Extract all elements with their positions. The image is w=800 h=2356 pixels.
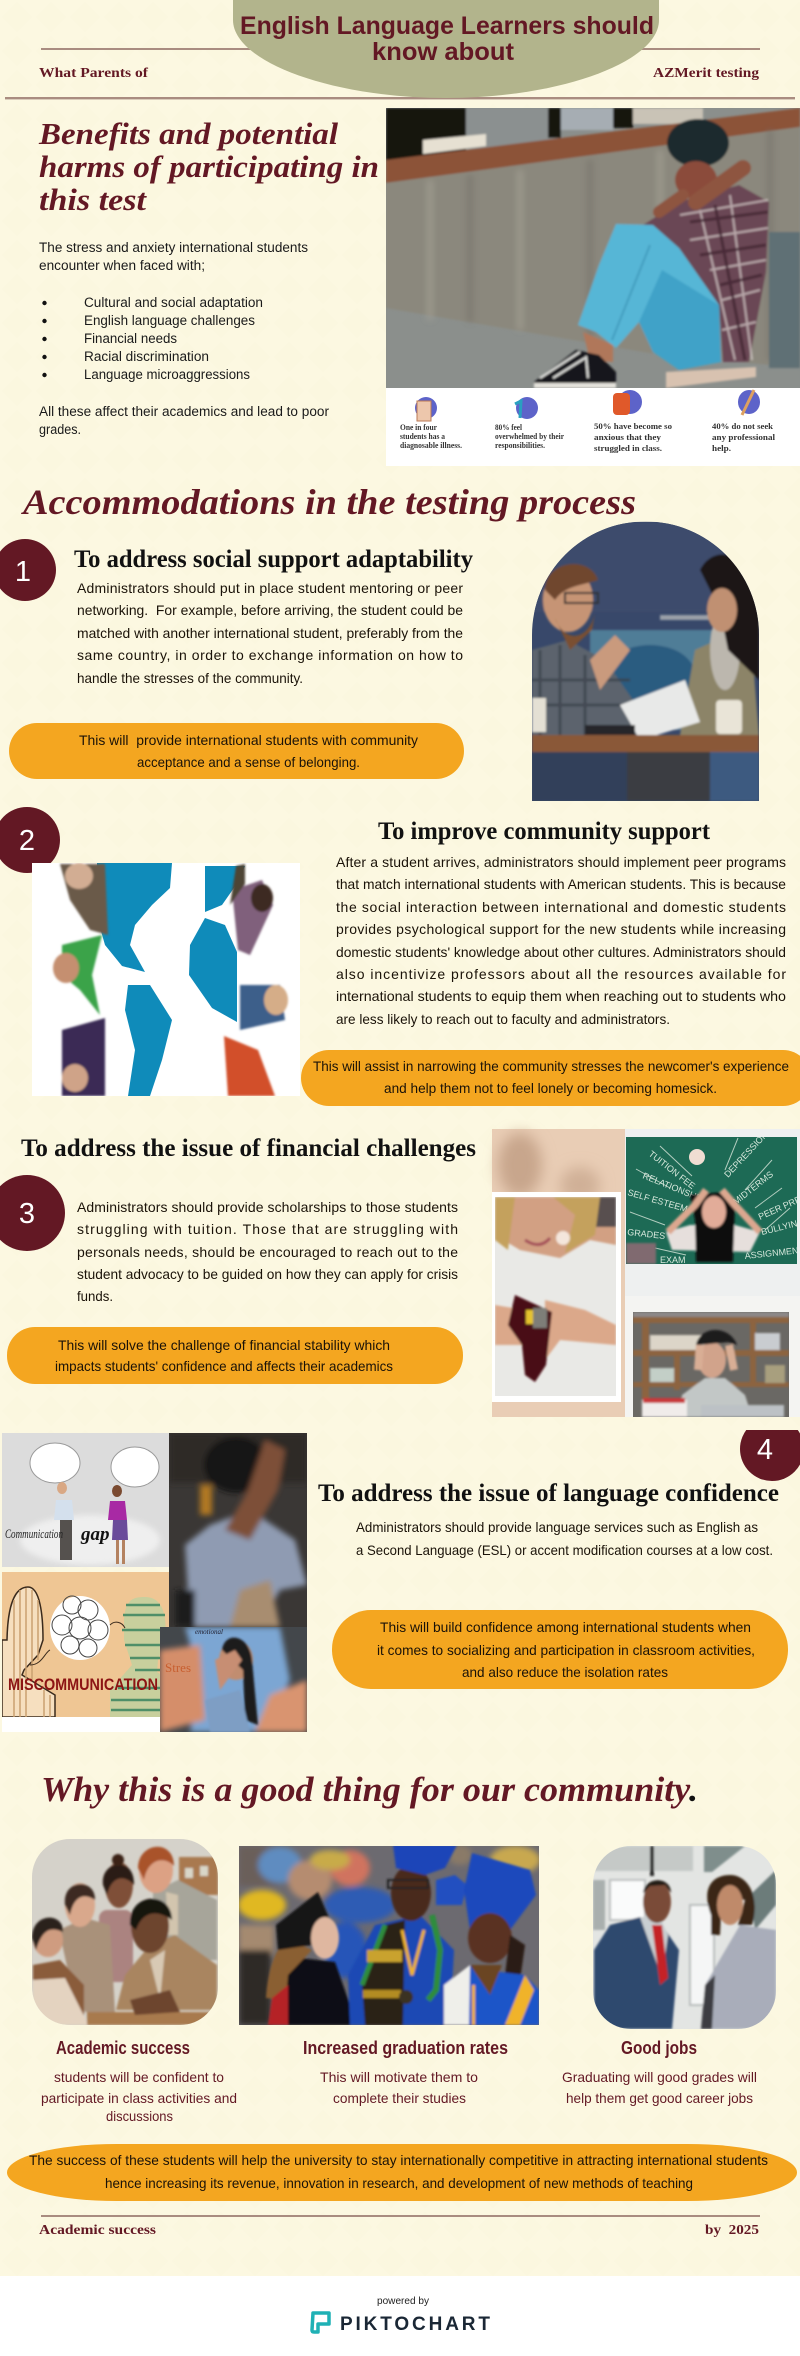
- bullet list: [42, 295, 263, 382]
- paragraph: mentoring: networking. For example, before arriving, the student could be: [77, 602, 463, 618]
- description: participate in class activities and: [41, 2090, 237, 2106]
- photo: woman with head in hands: [169, 1433, 307, 1627]
- image: world map with people: [32, 863, 300, 1096]
- heading: community support: To improve community support: [378, 818, 711, 845]
- intro text: The stress and anxiety international students: [39, 240, 308, 255]
- intro text: encounter when faced with;: [39, 258, 205, 273]
- closing text: grades.: [39, 422, 81, 437]
- illustration: communication gap: [2, 1433, 169, 1567]
- number badge 3: 3: [19, 1198, 35, 1230]
- bullet list: Financial needs: [84, 331, 177, 346]
- photo: student overwhelmed at chalkboard: EXAM: [660, 1255, 686, 1265]
- callout 4: it comes to socializing and participation in classroom activities,: [377, 1642, 755, 1658]
- number badge 2: [0, 807, 60, 873]
- section 1: social support: [0, 539, 473, 779]
- number badge 2: 2: [19, 825, 35, 857]
- header left label: What Parents of: [39, 66, 148, 81]
- paragraph: scholarships: [77, 1199, 458, 1304]
- photo: student overwhelmed at chalkboard: [626, 1129, 800, 1265]
- footer right label: by 2025: [705, 2223, 759, 2238]
- heading: benefits and potential harms: [38, 116, 379, 217]
- callout: university benefits: [7, 2144, 797, 2201]
- heading: benefits and potential harms: this test: [39, 182, 148, 217]
- paragraph: scholarships: student advocacy to be guided on how they can apply for crisis: [77, 1266, 458, 1282]
- number badge 4: [740, 1430, 800, 1481]
- benefit: good jobs: [562, 2038, 757, 2106]
- description: students will be confident to: [54, 2069, 224, 2085]
- stat: 40% no help: help.: [712, 444, 731, 453]
- benefit: academic success: [41, 2038, 237, 2124]
- photo: two business professionals: [593, 1846, 776, 2029]
- bullet list: Language microaggressions: [84, 367, 250, 382]
- photo: graduates in blue gowns: [238, 1845, 540, 2025]
- intro text: [39, 240, 308, 273]
- stat: 80% feel overwhelmed: [495, 397, 564, 450]
- paragraph: peer programs: provides psychological support for the new students while increasing: [336, 921, 786, 937]
- callout 2: This will assist in narrowing the community stresses the newcomer's experience: [313, 1058, 789, 1074]
- paragraph: peer programs: that match international students with American students. This is because: [336, 876, 786, 892]
- bullet list: Cultural and social adaptation: [84, 295, 263, 310]
- paragraph: mentoring: [77, 580, 463, 686]
- description: [320, 2069, 478, 2106]
- bullet list: English language challenges: [84, 313, 255, 328]
- section 4: language confidence: [318, 1417, 800, 1689]
- paragraph: mentoring: same country, in order to exchange information on how to: [77, 647, 463, 663]
- callout 3: [7, 1327, 463, 1384]
- callout 3: This will solve the challenge of financial stability which: [58, 1337, 390, 1353]
- benefit: increased graduation rates: [303, 2038, 508, 2106]
- heading: financial challenges: To address the issue of financial challenges: [21, 1135, 476, 1162]
- paragraph: peer programs: international students to equip them when reaching out to students who: [336, 988, 786, 1004]
- paragraph: scholarships: struggling with tuition. Those that are struggling with: [77, 1221, 458, 1237]
- piktochart wordmark: PIKTOCHART: [340, 2314, 490, 2335]
- photo: woman with empty wallet: [495, 1197, 616, 1396]
- paragraph: language services: a Second Language (ESL) or accent modification courses at a low cost.: [356, 1542, 773, 1558]
- stat: 50% anxious: [594, 390, 672, 453]
- footer line and labels: [39, 2215, 760, 2238]
- title: English Language Learners should: [240, 12, 654, 40]
- paragraph: language services: [356, 1519, 773, 1558]
- callout 2: and help them not to feel lonely or becoming homesick.: [384, 1080, 717, 1096]
- description: Graduating will good grades will: [562, 2069, 757, 2085]
- closing text: [39, 404, 329, 437]
- stat: one in four: diagnosable illness.: [400, 441, 462, 450]
- paragraph: peer programs: domestic students' knowledge about other cultures. Administrators should: [336, 944, 786, 960]
- paragraph: peer programs: [336, 854, 786, 1027]
- callout: university benefits: The success of these students will help the university to stay internationally competitive in attracting international students: [29, 2152, 768, 2168]
- description: complete their studies: [333, 2090, 466, 2106]
- illustration: communication gap: gap: [80, 1524, 110, 1545]
- photo: stressed student sitting against wall: [386, 108, 800, 388]
- label: Increased graduation rates: [303, 2038, 508, 2058]
- heading: language confidence: To address the issue of language confidence: [318, 1480, 779, 1507]
- stat: one in four: One in four: [400, 423, 437, 432]
- photo collage: financial stress: [492, 1129, 800, 1417]
- illustration: miscommunication: [2, 1572, 169, 1732]
- illustration: communication gap: Communication: [5, 1526, 63, 1541]
- callout 4: This will build confidence among international students when: [380, 1619, 751, 1635]
- paragraph: scholarships: Administrators should provide scholarships to those students: [77, 1199, 458, 1215]
- label: Academic success: [56, 2038, 190, 2058]
- photo: student overwhelmed at chalkboard: DEPRESSION: [722, 1129, 770, 1179]
- description: help them get good career jobs: [566, 2090, 753, 2106]
- panel: student mental health stats: [386, 388, 800, 466]
- number badge 3: [0, 1175, 65, 1251]
- paragraph: peer programs: also incentivize professors about all the resources available for: [336, 966, 786, 982]
- stat: 80% feel overwhelmed: 80% feel: [495, 423, 523, 432]
- footer left label: Academic success: [39, 2223, 157, 2238]
- paragraph: language services: Administrators should provide language services such as English as: [356, 1519, 758, 1535]
- stat: 40% no help: [712, 390, 776, 453]
- closing text: All these affect their academics and lead to poor: [39, 404, 329, 419]
- paragraph: mentoring: handle the stresses of the community.: [77, 670, 303, 686]
- callout 2: [301, 1050, 800, 1106]
- callout 1: [9, 723, 464, 779]
- paragraph: peer programs: the social interaction between international and domestic students: [336, 899, 786, 915]
- photo: man with laptop in front of bookshelves: [633, 1312, 789, 1417]
- powered by footer: [0, 2276, 800, 2356]
- photo: student overwhelmed at chalkboard: GRADES: [627, 1227, 666, 1241]
- photo: two people talking at a table: [532, 522, 759, 801]
- number badge 1: [0, 539, 56, 601]
- panel: benefits and harms: [38, 116, 379, 437]
- heading: benefits and potential harms: harms of participating in: [39, 149, 379, 184]
- callout 4: [332, 1610, 788, 1689]
- photo: student overwhelmed at chalkboard: RELATIONSHIP: [641, 1171, 706, 1204]
- paragraph: scholarships: personals needs, should be encouraged to reach out to the: [77, 1244, 458, 1260]
- header right label: AZMerit testing: [653, 66, 759, 81]
- section 2: community support: [0, 807, 800, 1106]
- paragraph: peer programs: are less likely to reach out to faculty and administrators.: [336, 1011, 670, 1027]
- stat: 40% no help: 40% do not seek: [712, 422, 774, 431]
- stat: 50% anxious: struggled in class.: [594, 444, 662, 453]
- stat: one in four: students has a: [400, 432, 445, 441]
- stat: 50% anxious: 50% have become so: [594, 422, 672, 431]
- paragraph: mentoring: Administrators should put in place student mentoring or peer: [77, 580, 463, 596]
- callout: university benefits: hence increasing its revenue, innovation in research, and development of new methods of teaching: [105, 2175, 693, 2191]
- photo: stressed woman with text overlay: emotional: [195, 1628, 223, 1636]
- stat: 80% feel overwhelmed: responsibilities.: [495, 441, 545, 450]
- paragraph: peer programs: After a student arrives, administrators should implement peer programs: [336, 854, 786, 870]
- number badge 1: 1: [15, 556, 31, 588]
- photo: student overwhelmed at chalkboard: SELF ESTEEM: [626, 1187, 689, 1214]
- callout 3: impacts students' confidence and affects their academics: [55, 1358, 393, 1374]
- photo: stressed woman with text overlay: Stres: [165, 1660, 191, 1675]
- bullet list: Racial discrimination: [84, 349, 209, 364]
- heading: why this is a good thing: Why this is a good thing for our community .: [41, 1770, 698, 1809]
- powered by text: powered by: [377, 2296, 429, 2307]
- number badge 4: 4: [757, 1434, 773, 1466]
- paragraph: mentoring: matched with another international student, preferably from the: [77, 625, 463, 641]
- title: [240, 12, 654, 66]
- description: [41, 2069, 237, 2124]
- photo: stressed woman with text overlay: [160, 1627, 307, 1732]
- label: Good jobs: [621, 2038, 697, 2058]
- photo: student overwhelmed at chalkboard: TUITION FEE: [647, 1149, 697, 1191]
- paragraph: scholarships: funds.: [77, 1288, 113, 1304]
- stat: 80% feel overwhelmed: overwhelmed by their: [495, 432, 564, 441]
- photo collage: communication difficulties: [2, 1433, 307, 1732]
- description: This will motivate them to: [320, 2069, 478, 2085]
- photo: colleagues around a laptop: [32, 1839, 218, 2025]
- icon: piktochart logo: [312, 2313, 329, 2332]
- callout 4: and also reduce the isolation rates: [462, 1664, 668, 1680]
- description: [562, 2069, 757, 2106]
- title: know about: [372, 38, 515, 66]
- heading: social support: To address social support adaptability: [74, 546, 473, 573]
- section 3: financial challenges: [0, 1135, 476, 1384]
- heading: benefits and potential harms: Benefits and potential: [38, 116, 338, 151]
- description: discussions: [106, 2108, 173, 2124]
- stat: 50% anxious: anxious that they: [594, 433, 661, 442]
- heading: accommodations: Accommodations in the testing process: [21, 482, 636, 522]
- illustration: miscommunication: MISCOMMUNICATION: [8, 1675, 158, 1694]
- stat: 40% no help: any professional: [712, 433, 776, 442]
- callout 1: acceptance and a sense of belonging.: [137, 754, 360, 770]
- photo: student overwhelmed at chalkboard: MIDTERMS: [731, 1169, 775, 1207]
- callout 1: This will provide international students with community: [79, 732, 418, 748]
- stat: one in four: [400, 397, 462, 450]
- header: [5, 0, 795, 99]
